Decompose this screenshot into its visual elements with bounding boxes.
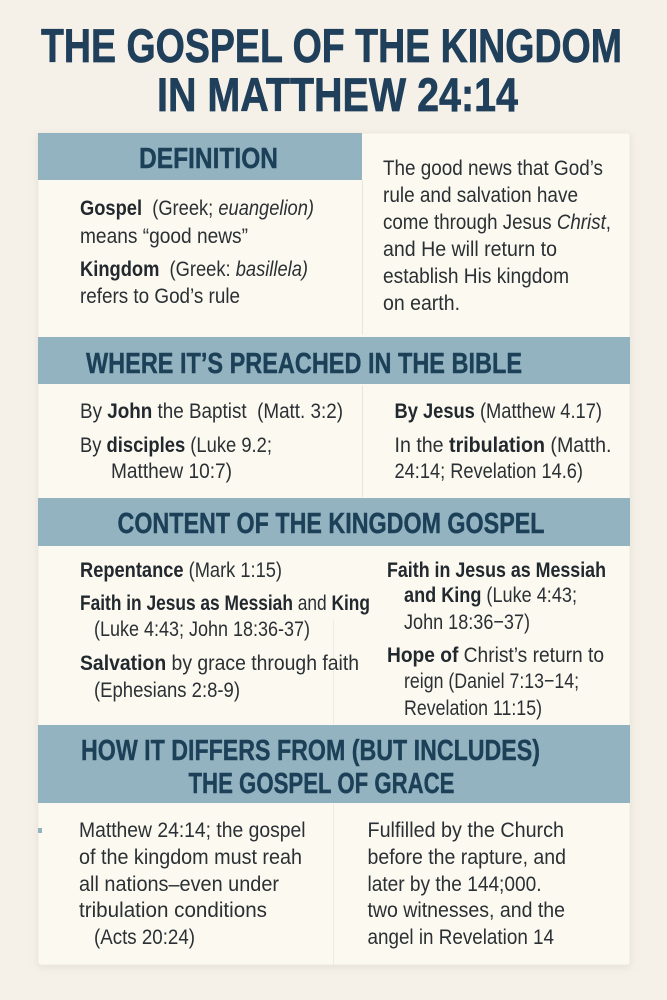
text block: definition terms: Gospel (Greek; euangelion): [80, 196, 314, 220]
text block: differs right: angel in Revelation 14: [368, 925, 554, 949]
text block: definition summary: on earth.: [383, 291, 460, 315]
text block: definition terms: refers to God’s rule: [80, 284, 240, 308]
text block: preached right: 24:14; Revelation 14.6): [394, 459, 583, 483]
text block: content right: reign (Daniel 7:13−14;: [404, 669, 579, 693]
text block: content right: and King (Luke 4:43;: [404, 583, 577, 607]
panel: main card: [38, 133, 630, 965]
text block: preached right: By Jesus (Matthew 4.17): [394, 399, 602, 423]
heading: definition: DEFINITION: [139, 143, 278, 175]
text block: definition terms: means “good news”: [80, 224, 248, 248]
text block: differs right: later by the 144;000.: [368, 872, 542, 896]
text block: content left: (Luke 4:43; John 18:36-37): [94, 617, 310, 641]
text block: preached left: [80, 399, 343, 483]
text block: definition terms: Kingdom (Greek: basillela): [80, 257, 308, 281]
text block: differs left: all nations–even under: [79, 872, 279, 896]
text block: differs right: Fulfilled by the Church: [368, 818, 564, 842]
text block: differs right: [368, 818, 566, 949]
text block: content right: John 18:36−37): [404, 610, 530, 634]
title: IN MATTHEW 24:14: [157, 69, 518, 122]
text block: differs left: tribulation conditions: [79, 898, 267, 922]
text block: definition summary: come through Jesus Christ,: [383, 210, 611, 234]
heading: where it's preached: [38, 337, 630, 384]
text block: definition summary: rule and salvation have: [383, 183, 578, 207]
text block: definition summary: establish His kingdom: [383, 264, 569, 288]
panel: content of the kingdom gospel: [38, 498, 630, 725]
text block: content left: (Ephesians 2:8-9): [94, 678, 240, 702]
text block: differs left: of the kingdom must reah: [79, 845, 302, 869]
heading: where it's preached: WHERE IT’S PREACHED IN THE BIBLE: [86, 348, 522, 380]
text block: content left: [80, 558, 370, 702]
text block: preached left: By John the Baptist (Matt. 3:2): [80, 399, 343, 423]
text block: definition terms: [80, 196, 314, 308]
heading: how it differs: THE GOSPEL OF GRACE: [188, 768, 454, 800]
title: [41, 20, 622, 122]
heading: content: CONTENT OF THE KINGDOM GOSPEL: [118, 508, 544, 540]
heading: definition: [38, 133, 362, 180]
text block: content right: [387, 558, 606, 720]
text block: preached left: Matthew 10:7): [111, 459, 232, 483]
heading: content: [38, 498, 630, 546]
text block: content left: Repentance (Mark 1:15): [80, 558, 282, 582]
text block: differs left: Matthew 24:14; the gospel: [79, 818, 306, 842]
text block: content right: Revelation 11:15): [404, 696, 542, 720]
text block: differs right: before the rapture, and: [368, 845, 566, 869]
text block: content left: Salvation by grace through faith: [80, 651, 359, 675]
text block: content right: Hope of Christ’s return to: [387, 643, 604, 667]
text block: content left: Faith in Jesus as Messiah and King: [80, 591, 370, 615]
text block: content right: Faith in Jesus as Messiah: [387, 558, 606, 582]
text block: preached right: In the tribulation (Matth.: [394, 433, 612, 457]
text block: definition summary: and He will return to: [383, 237, 557, 261]
panel: definition: [38, 133, 611, 335]
panel: where it's preached: [38, 337, 630, 497]
heading: how it differs: [38, 725, 630, 803]
panel: how it differs: [38, 725, 630, 965]
text block: definition summary: The good news that God’s: [383, 156, 603, 180]
text block: preached right: [394, 399, 612, 483]
text block: definition summary: [383, 156, 611, 315]
text block: differs left: [79, 818, 306, 949]
text block: differs left: (Acts 20:24): [94, 925, 195, 949]
text block: preached left: By disciples (Luke 9.2;: [80, 433, 272, 457]
text block: differs right: two witnesses, and the: [368, 898, 565, 922]
heading: how it differs: HOW IT DIFFERS FROM (BUT INCLUDES): [81, 735, 540, 767]
